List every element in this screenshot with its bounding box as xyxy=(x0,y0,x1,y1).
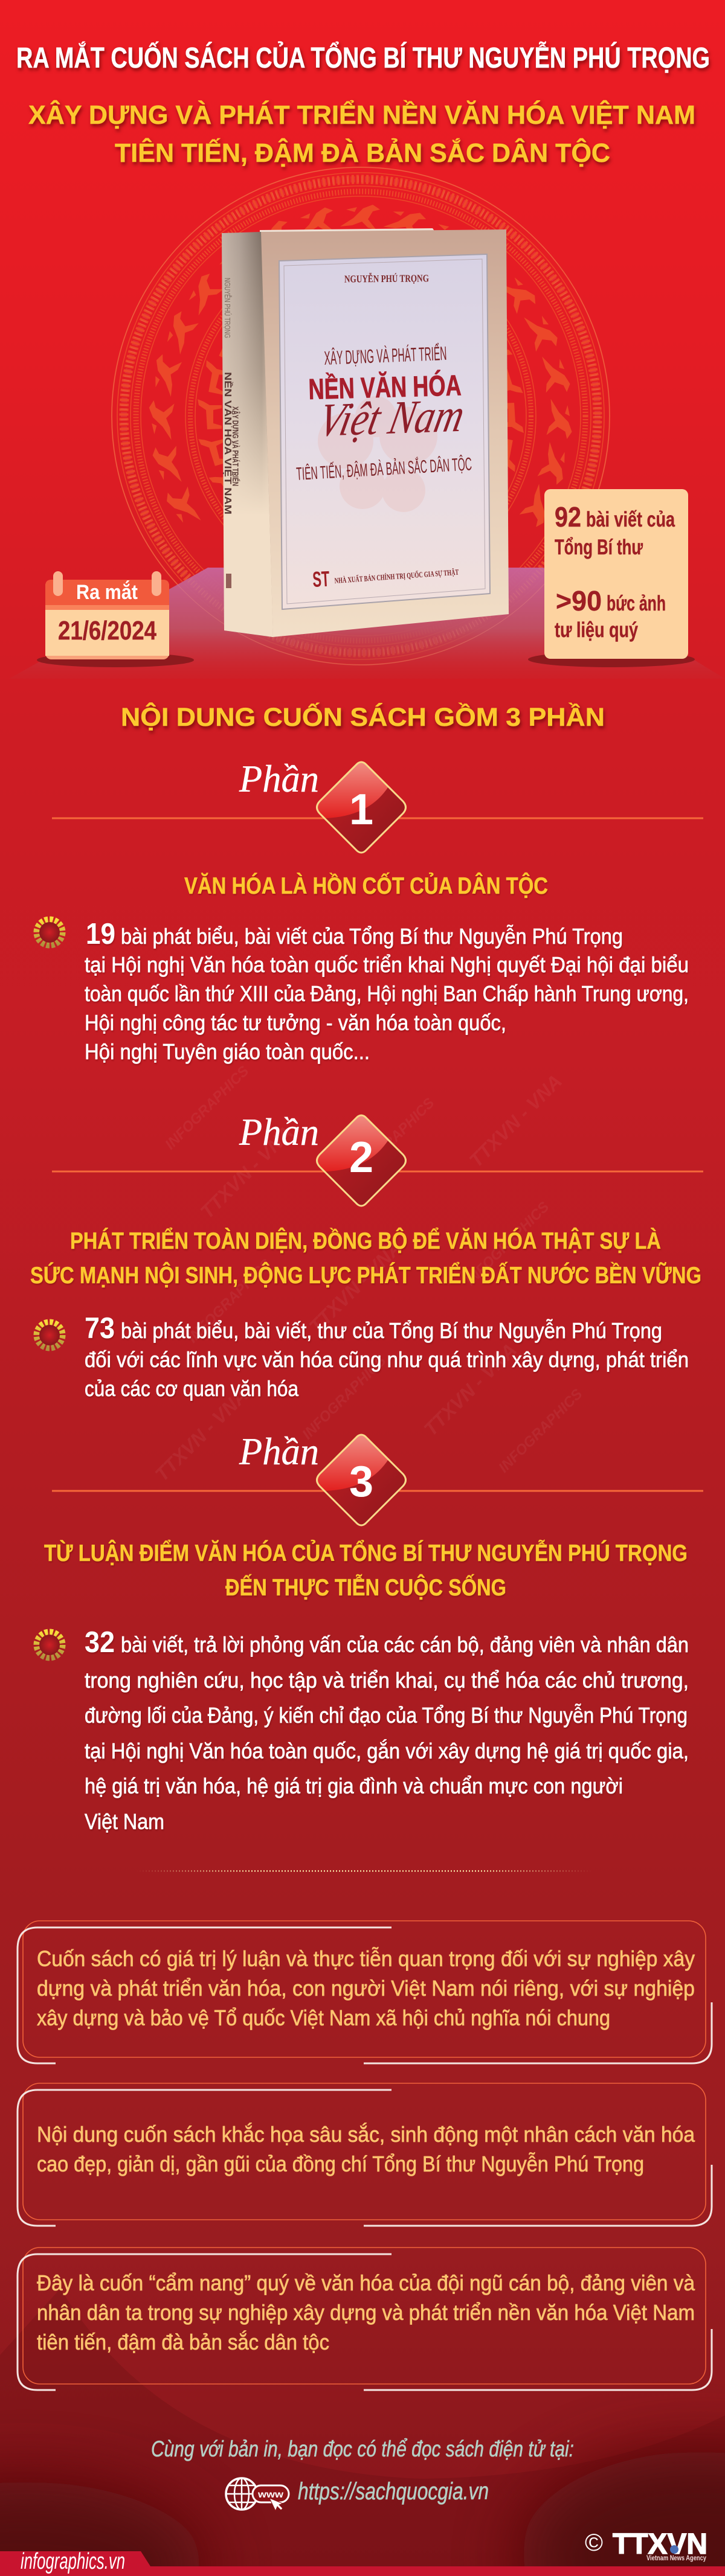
stat box: >90 xyxy=(556,585,602,617)
icon: globe www: www xyxy=(257,2490,284,2500)
callout box 1: xây dựng và bảo vệ Tổ quốc Việt Nam xã hội chủ nghĩa nói chung xyxy=(37,2005,610,2030)
book: NHÀ XUẤT BẢN CHÍNH TRỊ QUỐC GIA SỰ THẬT xyxy=(334,568,459,585)
book xyxy=(222,228,509,637)
callout box 1: Cuốn sách có giá trị lý luận và thực tiễn quan trọng đối với sự nghiệp xây xyxy=(37,1946,695,1971)
part 3 heading xyxy=(44,1539,688,1601)
calendar: release date: 21/6/2024 xyxy=(58,616,156,646)
stat box: bài viết của xyxy=(586,508,675,531)
book spine: NGUYỄN PHÚ TRỌNG xyxy=(223,278,232,338)
part 1 text: bài phát biểu, bài viết của Tổng Bí thư Nguyễn Phú Trọng xyxy=(121,924,623,949)
contents heading: NỘI DUNG CUỐN SÁCH GỒM 3 PHẦN xyxy=(121,702,605,732)
bullet icon xyxy=(37,1322,62,1348)
part 1: Phần xyxy=(239,757,319,800)
badge 2: 2 xyxy=(349,1133,373,1182)
website url: https://sachquocgia.vn xyxy=(298,2478,489,2505)
part 2: Phần xyxy=(239,1110,319,1153)
watermarks: TTXVN - VNA xyxy=(419,1339,521,1440)
logo: TTXVN: Vietnam News Agency xyxy=(646,2554,706,2562)
part 2 text: của các cơ quan văn hóa xyxy=(85,1376,299,1401)
part 3 heading: ĐẾN THỰC TIỄN CUỘC SỐNG xyxy=(225,1574,506,1601)
e-book note: Cùng với bản in, bạn đọc có thể đọc sách điện tử tại: xyxy=(151,2437,574,2461)
book: XÂY DỰNG VÀ PHÁT TRIỂN xyxy=(324,342,447,369)
part 2 xyxy=(30,1110,703,1401)
book spine xyxy=(222,232,273,637)
part 1 text xyxy=(85,918,689,1064)
badge 2 xyxy=(313,1111,406,1206)
part 1 text: tại Hội nghị Văn hóa toàn quốc triển khai Nghị quyết Đại hội đại biểu xyxy=(85,952,689,977)
book: TIÊN TIẾN, ĐẬM ĐÀ BẢN SẮC DÂN TỘC xyxy=(295,453,472,484)
book subtitle xyxy=(28,99,695,168)
watermarks: INFOGRAPHICS xyxy=(184,1256,274,1346)
book page edge xyxy=(260,228,435,234)
stat box shadow xyxy=(528,652,695,667)
part 3 text: 32 xyxy=(85,1626,115,1659)
part 3 text: trong nghiên cứu, học tập và triển khai, cụ thể hóa các chủ trương, xyxy=(85,1668,689,1693)
book: NỀN VĂN HÓA xyxy=(308,368,462,406)
part 2 text: 73 xyxy=(85,1312,115,1345)
book spine: NỀN VĂN HÓA VIỆT NAM xyxy=(222,372,234,514)
calendar shadow xyxy=(37,653,194,667)
watermarks: INFOGRAPHICS xyxy=(299,1353,389,1443)
stat box xyxy=(528,489,695,667)
callout box 2: Nội dung cuốn sách khắc họa sâu sắc, sinh động một nhân cách văn hóa xyxy=(37,2122,695,2147)
part 1 text: Hội nghị công tác tư tưởng - văn hóa toàn quốc, xyxy=(85,1010,506,1035)
part 3: Phần xyxy=(239,1430,319,1473)
part 1 heading: VĂN HÓA LÀ HỒN CỐT CỦA DÂN TỘC xyxy=(184,872,548,899)
callout box 1 xyxy=(18,1921,712,2063)
part 1 text: 19 xyxy=(86,918,115,950)
watermarks: TTXVN - VNA xyxy=(304,1236,406,1338)
watermarks xyxy=(150,1063,585,1485)
logo: TTXVN: © xyxy=(585,2530,603,2556)
bronze drum pattern xyxy=(112,167,610,665)
book spine: XÂY DỰNG VÀ PHÁT TRIỂN xyxy=(231,406,241,486)
logo: TTXVN: TTXVN xyxy=(613,2528,707,2560)
footer tag: infographics.vn xyxy=(21,2549,125,2574)
part 3 text xyxy=(85,1626,689,1834)
part 1 xyxy=(37,757,703,1064)
book subtitle: TIÊN TIẾN, ĐẬM ĐÀ BẢN SẮC DÂN TỘC xyxy=(115,137,610,168)
book: ST xyxy=(312,566,330,592)
icon: globe www xyxy=(226,2478,289,2511)
watermarks: TTXVN - VNA xyxy=(150,1384,252,1485)
footer tag xyxy=(0,2549,725,2576)
stat box: tư liệu quý xyxy=(555,618,638,642)
book cover label xyxy=(279,254,490,609)
watermarks: INFOGRAPHICS xyxy=(495,1386,585,1476)
callout box 1: dựng và phát triển văn hóa, con người Việt Nam nói riêng, với sự nghiệp xyxy=(37,1976,695,2001)
callout box 3 xyxy=(18,2248,712,2390)
part 3 text: hệ giá trị văn hóa, hệ giá trị gia đình và chuẩn mực con người xyxy=(85,1773,623,1798)
callout box 2: cao đẹp, giản dị, gần gũi của đồng chí Tổng Bí thư Nguyễn Phú Trọng xyxy=(37,2151,644,2176)
watermarks: INFOGRAPHICS xyxy=(347,1095,437,1185)
calendar: release date: Ra mắt xyxy=(76,581,138,604)
watermarks: TTXVN - VNA xyxy=(196,1121,297,1223)
bullet icon xyxy=(37,920,62,945)
badge 3: 3 xyxy=(349,1458,373,1506)
badge 1 xyxy=(313,758,406,853)
book subtitle: XÂY DỰNG VÀ PHÁT TRIỂN NỀN VĂN HÓA VIỆT NAM xyxy=(28,99,695,130)
callout box 2 xyxy=(18,2083,712,2226)
cover text: NGUYỄN PHÚ TRỌNG xyxy=(344,272,429,285)
watermarks: INFOGRAPHICS xyxy=(162,1063,252,1153)
callout box 3: tiên tiến, đậm đà bản sắc dân tộc xyxy=(37,2330,329,2354)
bullet icon xyxy=(37,1632,62,1658)
part 3 text: Việt Nam xyxy=(85,1809,164,1834)
book cover xyxy=(260,229,509,637)
calendar rings xyxy=(53,571,63,596)
book: Việt Nam xyxy=(314,389,469,447)
calendar: release date xyxy=(37,571,194,667)
lotus motif xyxy=(318,396,437,512)
badge 1: 1 xyxy=(349,786,373,834)
part 2 text xyxy=(85,1312,689,1401)
part 3 xyxy=(37,1430,703,1834)
watermarks: INFOGRAPHICS xyxy=(462,1199,552,1289)
part 2 heading xyxy=(30,1227,701,1289)
part 2 text: bài phát biểu, bài viết, thư của Tổng Bí thư Nguyễn Phú Trọng xyxy=(121,1318,662,1343)
stat box: bức ảnh xyxy=(607,592,666,615)
part 1 text: Hội nghị Tuyên giáo toàn quốc... xyxy=(85,1039,370,1064)
stat box: Tổng Bí thư xyxy=(555,536,643,559)
watermarks: TTXVN - VNA xyxy=(465,1070,566,1171)
platform xyxy=(9,167,725,679)
stat box: 92 xyxy=(555,501,581,533)
badge 3 xyxy=(313,1431,406,1525)
